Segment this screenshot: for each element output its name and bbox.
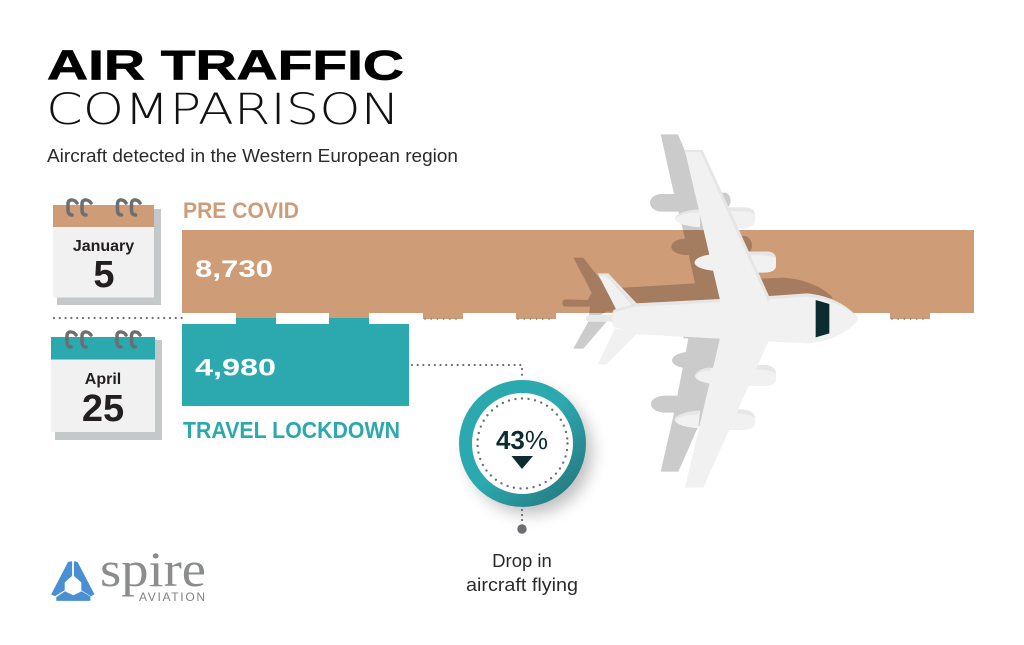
badge value: 43% bbox=[496, 425, 548, 455]
caption: aircraft flying bbox=[466, 574, 578, 595]
bar: travel lockdown bbox=[182, 318, 409, 406]
calendar day: 25 bbox=[82, 388, 124, 430]
bar body: pre covid bbox=[182, 230, 974, 319]
heading: pre covid: PRE COVID bbox=[183, 198, 299, 223]
dotted edge on tan tabs bbox=[425, 318, 929, 320]
engine highlights bbox=[674, 207, 776, 420]
subtitle: Aircraft detected in the Western European region bbox=[47, 145, 458, 166]
calendar rings bbox=[68, 200, 140, 215]
caption: Drop in bbox=[492, 550, 552, 571]
title line: air traffic: AIR TRAFFIC bbox=[47, 42, 404, 88]
logo wordmark: spire bbox=[100, 541, 206, 597]
wings bbox=[685, 150, 770, 488]
calendar rings bbox=[67, 332, 140, 347]
calendar: january 5 bbox=[53, 200, 161, 305]
title bbox=[46, 42, 404, 135]
calendar: april 25 bbox=[51, 332, 162, 440]
logo mark bbox=[52, 562, 94, 600]
connector: badge to caption bbox=[517, 510, 527, 534]
bar body: travel lockdown bbox=[182, 318, 409, 406]
rear stabilizer bbox=[586, 315, 615, 322]
heading: travel lockdown: TRAVEL LOCKDOWN bbox=[183, 417, 400, 443]
icon: down triangle bbox=[512, 456, 533, 469]
logo: spire aviation bbox=[52, 541, 206, 604]
engines bbox=[675, 207, 776, 430]
fuselage bbox=[611, 293, 858, 343]
bar value: 4,980: 4,980 bbox=[195, 354, 276, 382]
bar: pre covid bbox=[182, 230, 974, 319]
calendar month: April bbox=[85, 371, 121, 388]
caption bbox=[466, 550, 578, 595]
tail fins bbox=[598, 273, 637, 304]
logo subline: AVIATION bbox=[139, 590, 205, 604]
calendar day: 5 bbox=[93, 254, 115, 296]
title line: comparison: COMPARISON bbox=[46, 85, 400, 135]
dotted divider between calendars bbox=[54, 317, 182, 319]
airplane illustration bbox=[562, 134, 858, 488]
airplane shadow bbox=[562, 134, 833, 472]
drop badge bbox=[459, 380, 592, 514]
calendar month: January bbox=[73, 238, 134, 255]
bar value: 8,730: 8,730 bbox=[195, 256, 273, 283]
icon: cockpit windshield bbox=[816, 300, 829, 337]
connector: bar to drop badge bbox=[412, 365, 522, 379]
